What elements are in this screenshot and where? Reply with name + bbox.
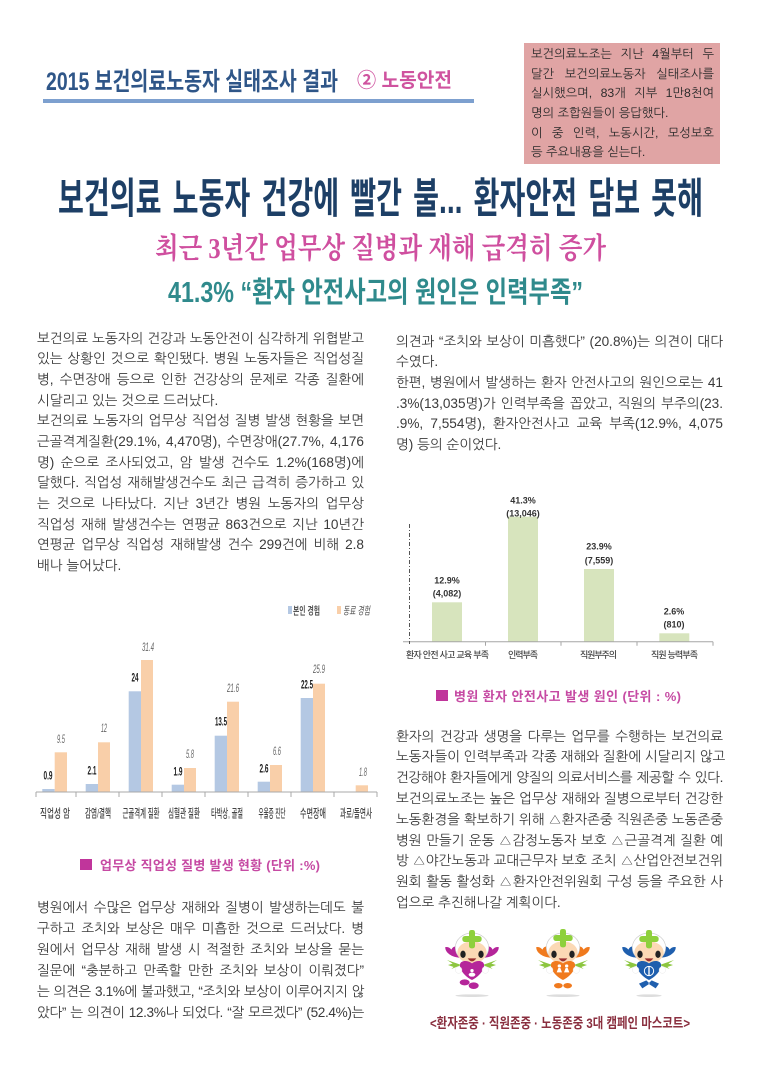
values: own experience: 2.6 — [260, 762, 269, 776]
legend — [288, 604, 371, 618]
text block: left column lower: 질문에 “충분하고 만족할 만한 조치와 보상이 이뤄졌다” — [37, 963, 364, 978]
text block: right column upper: 수였다. — [396, 354, 438, 369]
values: own experience: 1.9 — [174, 764, 183, 778]
legend: 본인 경험 — [293, 604, 320, 618]
values: colleague experience: 5.8 — [186, 749, 194, 761]
chart caption: occupational illness: 업무상 직업성 질병 발생 현황 (단위 :%) — [100, 858, 320, 873]
text block: left column intro: 배나 늘어났다. — [37, 558, 121, 573]
text block: right column upper: 한편, 병원에서 발생하는 환자 안전사고의 원인으로는 41 — [396, 375, 723, 390]
text block: left column intro: 달했다. 직업성 재해발생건수도 최근 급격히 증가하고 있 — [37, 475, 364, 490]
text block: left column intro: 명) 순으로 조사되었고, 암 발생 건수도 1.2%(168명)에 — [37, 455, 364, 470]
values: colleague experience: 9.5 — [57, 734, 65, 746]
subheading: survey series title: 2015 보건의료노동자 실태조사 결과 — [46, 68, 338, 96]
text block: survey note: 달간 보건의료노동자 실태조사를 — [531, 67, 714, 81]
category labels: 직업성 암 — [40, 806, 70, 820]
text block: survey note — [531, 47, 714, 159]
text block: right column lower: 건강해야 환자들에게 양질의 의료서비스를 제공할 수 있다. — [396, 770, 723, 785]
text block: left column lower: 구하고 조치와 보상은 매우 미흡한 것으로 드러났다. 병 — [37, 921, 364, 936]
text block: survey note: 실시했으며, 83개 지부 1만8천여 — [531, 86, 714, 100]
icon: blue mascot — [622, 930, 676, 997]
panel: survey intro note — [524, 43, 720, 164]
text block: left column intro: 보건의료 노동자의 업무상 직업성 질병 발생 현황을 보면 — [37, 413, 364, 428]
values: colleague experience: 25.9 — [312, 664, 325, 676]
sub-headline: injuries rising: 최근 3년간 업무상 질병과 재해 급격히 증가 — [155, 232, 607, 265]
category labels: 직원부주의 — [580, 649, 617, 660]
text block: left column intro: 는 것으로 나타났다. 지난 3년간 병원 노동자의 업무상 — [37, 496, 364, 511]
sub-headline: staffing shortage: 41.3% “환자 안전사고의 원인은 인력부족” — [168, 276, 583, 309]
text block: right column upper: 의견과 “조치와 보상이 미흡했다” (20.8%)는 의견이 대다 — [396, 334, 723, 349]
value labels: 41.3% — [510, 496, 536, 506]
category labels: 타박상, 골절 — [211, 806, 243, 820]
text block: left column intro: 병, 수면장애 등으로 인한 건강상의 문제로 각종 질환에 — [37, 372, 364, 387]
text block: left column lower: 병원에서 수많은 업무상 재해와 질병이 발생하는데도 불 — [37, 900, 364, 915]
values: own experience: 13.5 — [215, 714, 227, 728]
category labels: 수면장애 — [300, 806, 326, 820]
value labels: (13,046) — [506, 508, 540, 518]
text block: right column upper — [396, 334, 723, 452]
values: colleague experience: 21.6 — [226, 683, 239, 695]
mascot caption: <환자존중 · 직원존중 · 노동존중 3대 캠페인 마스코트> — [430, 1015, 690, 1031]
icon: orange mascot — [536, 929, 590, 997]
text block: left column intro — [37, 331, 364, 573]
category labels: 직원 능력부족 — [651, 649, 698, 660]
bars — [432, 517, 689, 642]
icon: magenta mascot — [445, 930, 499, 997]
text block: survey note: 명의 조합원들이 응답했다. — [531, 106, 668, 120]
category labels: 근골격계 질환 — [122, 806, 160, 820]
text block: left column lower: 는 의견은 3.1%에 불과했고, “조치와 보상이 이루어지지 않 — [37, 984, 364, 999]
value labels: 12.9% — [434, 576, 460, 586]
legend: 동료 경험 — [343, 604, 371, 618]
category labels: 과로/돌연사 — [340, 806, 372, 820]
text block: left column intro: 있는 상황인 것으로 확인됐다. 병원 노동자들은 직업성질 — [37, 351, 364, 366]
bars: colleague experience — [55, 660, 368, 792]
text block: left column intro: 보건의료 노동자의 건강과 노동안전이 심각하게 위협받고 — [37, 331, 364, 346]
value labels: (810) — [663, 620, 685, 630]
values: own experience: 2.1 — [88, 764, 97, 778]
mascots: three campaign characters — [445, 929, 676, 997]
text block: right column upper: .9%, 7,554명), 환자안전사고 교육 부족(12.9%, 4,075 — [396, 416, 723, 431]
values: own experience: 22.5 — [301, 678, 313, 692]
text block: survey note: 이 중 인력, 노동시간, 모성보호 — [531, 126, 714, 140]
values: own experience — [44, 670, 313, 782]
category labels: 우울증 진단 — [258, 806, 286, 820]
text block: right column lower: 원회 활동 활성화 △환자안전위원회 구성 등을 주요한 사 — [396, 874, 723, 889]
bar chart: occupational illness — [36, 604, 378, 820]
category labels: 감염/결핵 — [85, 806, 111, 820]
value labels: (4,082) — [433, 588, 461, 598]
bars: own experience — [42, 691, 313, 792]
text block: right column lower: 노동자들이 인력부족과 각종 재해와 질환에 시달리지 않고 — [396, 749, 725, 764]
text block: right column upper: 명) 등의 순이었다. — [396, 437, 501, 452]
values: own experience: 24 — [132, 670, 139, 684]
values: colleague experience: 6.6 — [273, 746, 281, 758]
text block: survey note: 보건의료노조는 지난 4월부터 두 — [531, 47, 714, 61]
value labels: 23.9% — [586, 542, 612, 552]
category labels: 환자 안전 사고 교육 부족 — [406, 649, 489, 660]
text block: left column intro: 직업성 재해 발생건수는 연평균 863건으로 지난 10년간 — [37, 517, 364, 532]
text block: left column lower: 았다” 는 의견이 12.3%나 되었다. “잘 모르겠다” (52.4%)는 — [37, 1005, 364, 1020]
values: colleague experience: 1.8 — [359, 767, 367, 779]
value labels — [433, 496, 685, 630]
bar chart: patient safety accident causes — [403, 496, 714, 660]
value labels: (7,559) — [585, 556, 613, 566]
subheading: survey series title: ② 노동안전 — [357, 69, 452, 92]
text block: right column lower: 노동환경을 확보하기 위해 △환자존중 직원존중 노동존중 — [396, 812, 723, 827]
category labels: 인력부족 — [508, 649, 538, 660]
text block: right column lower: 업으로 추진해나갈 계획이다. — [396, 895, 561, 910]
text block: right column lower: 환자의 건강과 생명을 다루는 업무를 수행하는 보건의료 — [396, 729, 723, 744]
category labels — [40, 806, 372, 820]
text block: right column lower: 병원 만들기 운동 △감정노동자 보호 △근골격계 질환 예 — [396, 833, 723, 848]
category labels — [406, 649, 698, 660]
text block: left column intro: 시달리고 있는 것으로 드러났다. — [37, 393, 218, 408]
text block: survey note: 등 주요내용을 싣는다. — [531, 145, 645, 159]
text block: right column lower: 방 △야간노동과 교대근무자 보호 조치 △산업안전보건위 — [396, 853, 723, 868]
text block: left column lower: 원에서 업무상 재해 발생 시 적절한 조치와 보상을 묻는 — [37, 942, 364, 957]
text block: left column intro: 근골격계질환(29.1%, 4,470명), 수면장애(27.7%, 4,176 — [37, 434, 364, 449]
values: colleague experience — [57, 642, 367, 779]
values: colleague experience: 12 — [101, 723, 107, 735]
text block: right column lower — [396, 729, 725, 910]
value labels: 2.6% — [664, 606, 684, 616]
text block: right column lower: 보건의료노조는 높은 업무상 재해와 질병으로부터 건강한 — [396, 791, 723, 806]
values: own experience: 0.9 — [44, 768, 53, 782]
text block: right column upper: .3%(13,035명)가 인력부족을 꼽았고, 직원의 부주의(23. — [396, 396, 723, 411]
chart caption: patient safety causes: 병원 환자 안전사고 발생 원인 (단위 : %) — [454, 689, 681, 704]
values: colleague experience: 31.4 — [142, 642, 154, 654]
category labels: 심혈관 질환 — [168, 806, 200, 820]
text block: left column intro: 연평균 업무상 직업성 재해발생 건수 299건에 비해 2.8 — [37, 537, 364, 552]
text block: left column lower — [37, 900, 364, 1020]
